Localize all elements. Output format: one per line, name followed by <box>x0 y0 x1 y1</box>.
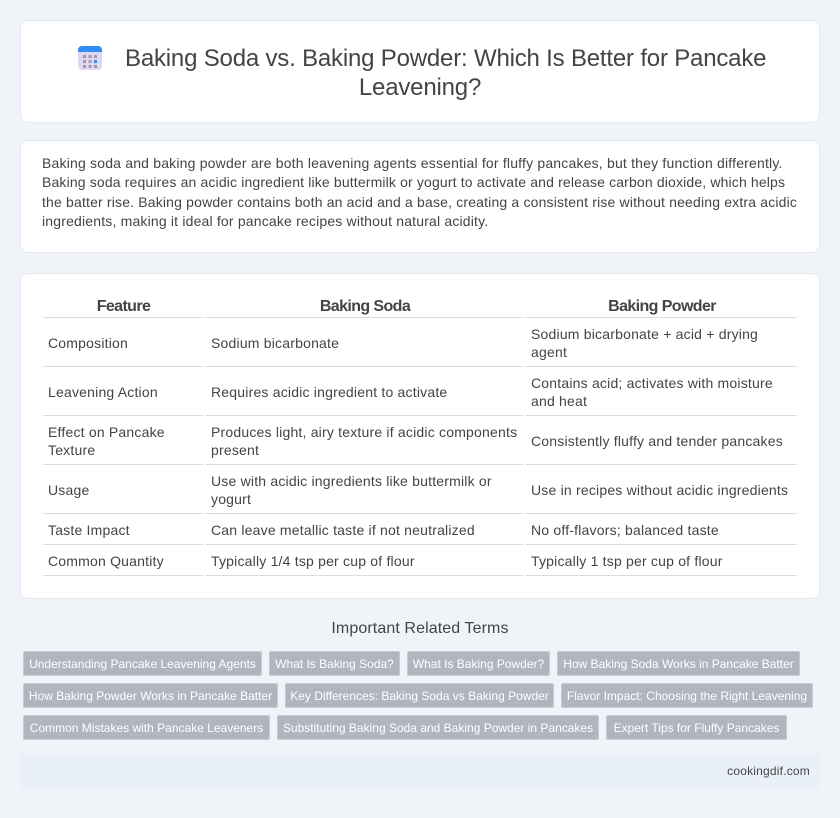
comparison table: Use with acidic ingredients like buttermilk or <box>211 473 492 489</box>
comparison table: No off-flavors; balanced taste <box>531 522 719 538</box>
intro text: the batter rise. Baking powder contains both an acid and a base, creating a consistent rise without needing extra acidic <box>42 194 797 210</box>
comparison table <box>43 298 797 576</box>
related term tags: How Baking Powder Works in Pancake Batter <box>29 689 272 703</box>
intro text: ingredients, making it ideal for pancake recipes without natural acidity. <box>42 213 488 229</box>
footer <box>20 754 820 788</box>
related term tags <box>23 651 813 740</box>
comparison table: Can leave metallic taste if not neutralized <box>211 522 475 538</box>
related term tags: How Baking Soda Works in Pancake Batter <box>563 657 794 671</box>
comparison table: Sodium bicarbonate <box>211 335 339 351</box>
comparison table: Requires acidic ingredient to activate <box>211 384 447 400</box>
comparison table: Usage <box>48 482 89 498</box>
intro panel <box>20 140 820 253</box>
comparison table: Produces light, airy texture if acidic components <box>211 424 517 440</box>
comparison table: Feature <box>97 298 150 315</box>
intro text: Baking soda and baking powder are both leavening agents essential for fluffy pancakes, but they function differently. <box>42 155 783 171</box>
comparison table: Typically 1/4 tsp per cup of flour <box>211 553 415 569</box>
comparison table: yogurt <box>211 491 251 507</box>
table panel <box>20 273 820 599</box>
comparison table: Common Quantity <box>48 553 164 569</box>
comparison table: and heat <box>531 393 587 409</box>
related term tags: What Is Baking Powder? <box>413 657 544 671</box>
related term tags: Flavor Impact: Choosing the Right Leavening <box>567 689 807 703</box>
source credit: cookingdif.com <box>727 764 810 778</box>
related term tags: Expert Tips for Fluffy Pancakes <box>614 721 779 735</box>
title <box>125 45 766 101</box>
comparison table: Baking Powder <box>608 298 716 315</box>
title: Baking Soda vs. Baking Powder: Which Is Better for Pancake <box>125 45 766 72</box>
related term tags: Understanding Pancake Leavening Agents <box>29 657 256 671</box>
icon: calendar <box>78 46 102 70</box>
related term tags: Substituting Baking Soda and Baking Powder in Pancakes <box>283 721 593 735</box>
comparison table: Composition <box>48 335 128 351</box>
intro text: Baking soda requires an acidic ingredient like buttermilk or yogurt to activate and release carbon dioxide, which helps <box>42 174 785 190</box>
comparison table: Baking Soda <box>320 298 410 315</box>
comparison table: Typically 1 tsp per cup of flour <box>531 553 723 569</box>
title: Leavening? <box>359 74 481 101</box>
comparison table: Consistently fluffy and tender pancakes <box>531 433 783 449</box>
comparison table: Use in recipes without acidic ingredients <box>531 482 788 498</box>
comparison table: present <box>211 442 259 458</box>
related term tags: Key Differences: Baking Soda vs Baking Powder <box>290 689 549 703</box>
intro text <box>42 155 797 229</box>
comparison table: Effect on Pancake <box>48 424 165 440</box>
related term tags: Common Mistakes with Pancake Leaveners <box>30 721 263 735</box>
comparison table: agent <box>531 344 567 360</box>
comparison table: Texture <box>48 442 95 458</box>
comparison table: Contains acid; activates with moisture <box>531 375 773 391</box>
comparison table: Sodium bicarbonate + acid + drying <box>531 326 758 342</box>
related terms heading: Important Related Terms <box>331 620 509 637</box>
related term tags: What Is Baking Soda? <box>275 657 394 671</box>
comparison table: Taste Impact <box>48 522 130 538</box>
comparison table: Leavening Action <box>48 384 158 400</box>
header panel <box>20 20 820 123</box>
